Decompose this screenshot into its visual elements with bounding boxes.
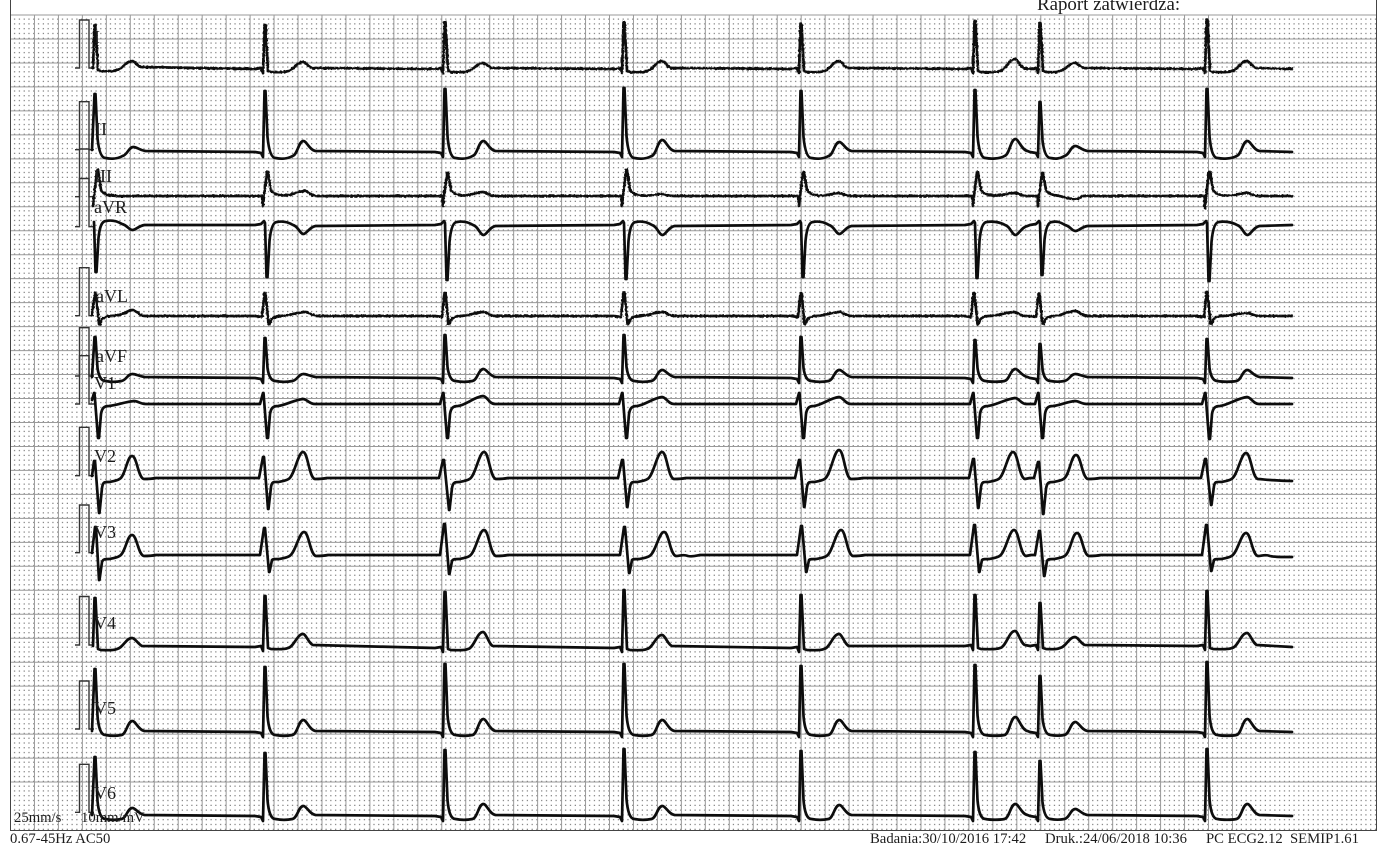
lead V4	[75, 590, 1292, 652]
label V5: V5	[94, 698, 116, 718]
trace III	[93, 170, 1292, 208]
lead aVL	[75, 268, 1292, 324]
trace aVL	[92, 292, 1292, 324]
lead V1	[75, 356, 1292, 439]
calibration pulse V4	[75, 596, 94, 645]
footer: print date: Druk.:24/06/2018 10:36	[1045, 831, 1187, 847]
lead III	[75, 149, 1292, 208]
calibration pulse V5	[75, 681, 94, 729]
paper speed note: 25mm/s	[14, 810, 62, 826]
calibration pulse V6	[75, 764, 94, 812]
calibration pulse aVF	[75, 328, 94, 376]
lead V3	[75, 505, 1292, 580]
footer: device version: SEMIP1.61	[1290, 831, 1359, 847]
footer: software version: PC ECG2.12	[1206, 831, 1283, 847]
label aVL: aVL	[96, 286, 128, 306]
label V1: V1	[94, 373, 116, 393]
trace aVF	[92, 335, 1292, 383]
label V6: V6	[94, 783, 116, 803]
label V3: V3	[94, 522, 116, 542]
trace V3	[92, 524, 1292, 580]
calibration pulse V2	[75, 427, 94, 476]
calibration pulse V3	[75, 505, 94, 553]
calibration pulse I	[75, 20, 94, 68]
trace V4	[93, 590, 1292, 652]
lead aVF	[75, 328, 1292, 383]
calibration pulse aVR	[75, 178, 94, 227]
calibration pulse III	[75, 149, 94, 197]
calibration pulse II	[75, 102, 94, 150]
trace V2	[92, 450, 1292, 514]
trace II	[92, 88, 1292, 159]
label aVR: aVR	[94, 197, 127, 217]
trace aVR	[94, 221, 1292, 281]
lead II	[75, 88, 1292, 159]
trace V6	[92, 749, 1292, 821]
lead V5	[75, 662, 1292, 737]
calibration pulse aVL	[75, 268, 94, 316]
lead V2	[75, 427, 1292, 514]
trace V1	[92, 393, 1292, 439]
gain note: 10mm/mV	[81, 810, 145, 826]
calibration pulse V1	[75, 356, 94, 404]
label III: III	[94, 166, 112, 186]
label V2: V2	[94, 446, 116, 466]
label I: I	[94, 27, 100, 47]
lead aVR	[75, 178, 1292, 281]
footer: examination date: Badania:30/10/2016 17:42	[870, 831, 1026, 847]
trace I	[93, 20, 1292, 73]
trace V5	[92, 662, 1292, 737]
footer: filter settings: 0.67-45Hz AC50	[10, 831, 110, 847]
lead I	[75, 20, 1292, 73]
label V4: V4	[94, 613, 116, 633]
label II: II	[95, 119, 107, 139]
lead V6	[75, 749, 1292, 821]
label aVF: aVF	[96, 346, 127, 366]
